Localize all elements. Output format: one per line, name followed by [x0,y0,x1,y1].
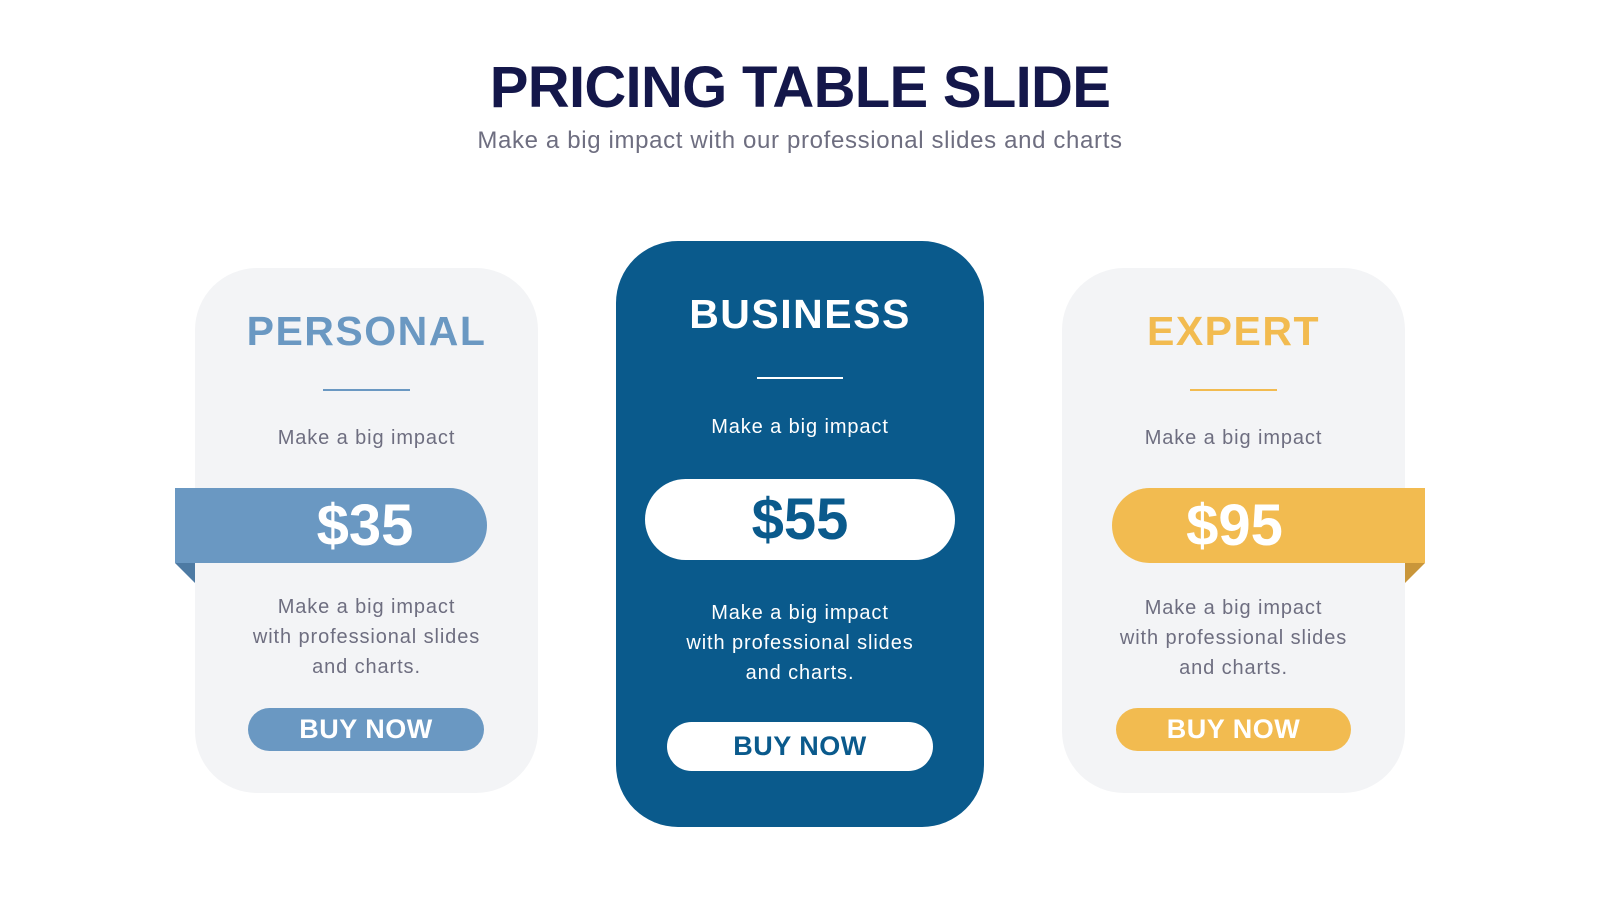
tagline: Make a big impact [711,416,889,438]
button: BUY NOW [1167,714,1300,744]
description: and charts. [312,656,421,678]
button: BUY NOW [733,731,867,761]
description: with professional slides [686,632,914,654]
price pill: $55 [752,487,848,552]
description: and charts. [1179,657,1288,679]
button: BUY NOW [299,714,433,744]
description: Make a big impact [1145,597,1322,619]
tagline: Make a big impact [1145,427,1322,449]
heading: expert: EXPERT [1147,308,1320,354]
button [248,708,484,751]
description [1120,597,1347,679]
subtitle: Make a big impact with our professional slides and charts [477,127,1123,154]
description [252,596,480,678]
description [686,602,914,684]
panel: expert [1062,268,1405,793]
button [667,722,933,771]
ribbon: $95 [1112,488,1425,583]
tagline: Make a big impact [278,427,455,449]
title: PRICING TABLE SLIDE [490,55,1110,120]
description: Make a big impact [711,602,889,624]
button [1116,708,1351,751]
description: with professional slides [1120,627,1347,649]
description: and charts. [746,662,854,684]
price pill [645,479,955,560]
panel: personal [195,268,538,793]
heading: personal: PERSONAL [247,308,486,354]
panel: business [616,241,984,827]
heading: business: BUSINESS [689,291,911,337]
ribbon: $35 [175,488,487,583]
description: with professional slides [253,626,480,648]
ribbon: $35: $35 [317,493,413,558]
description: Make a big impact [278,596,455,618]
ribbon: $95: $95 [1186,493,1283,558]
